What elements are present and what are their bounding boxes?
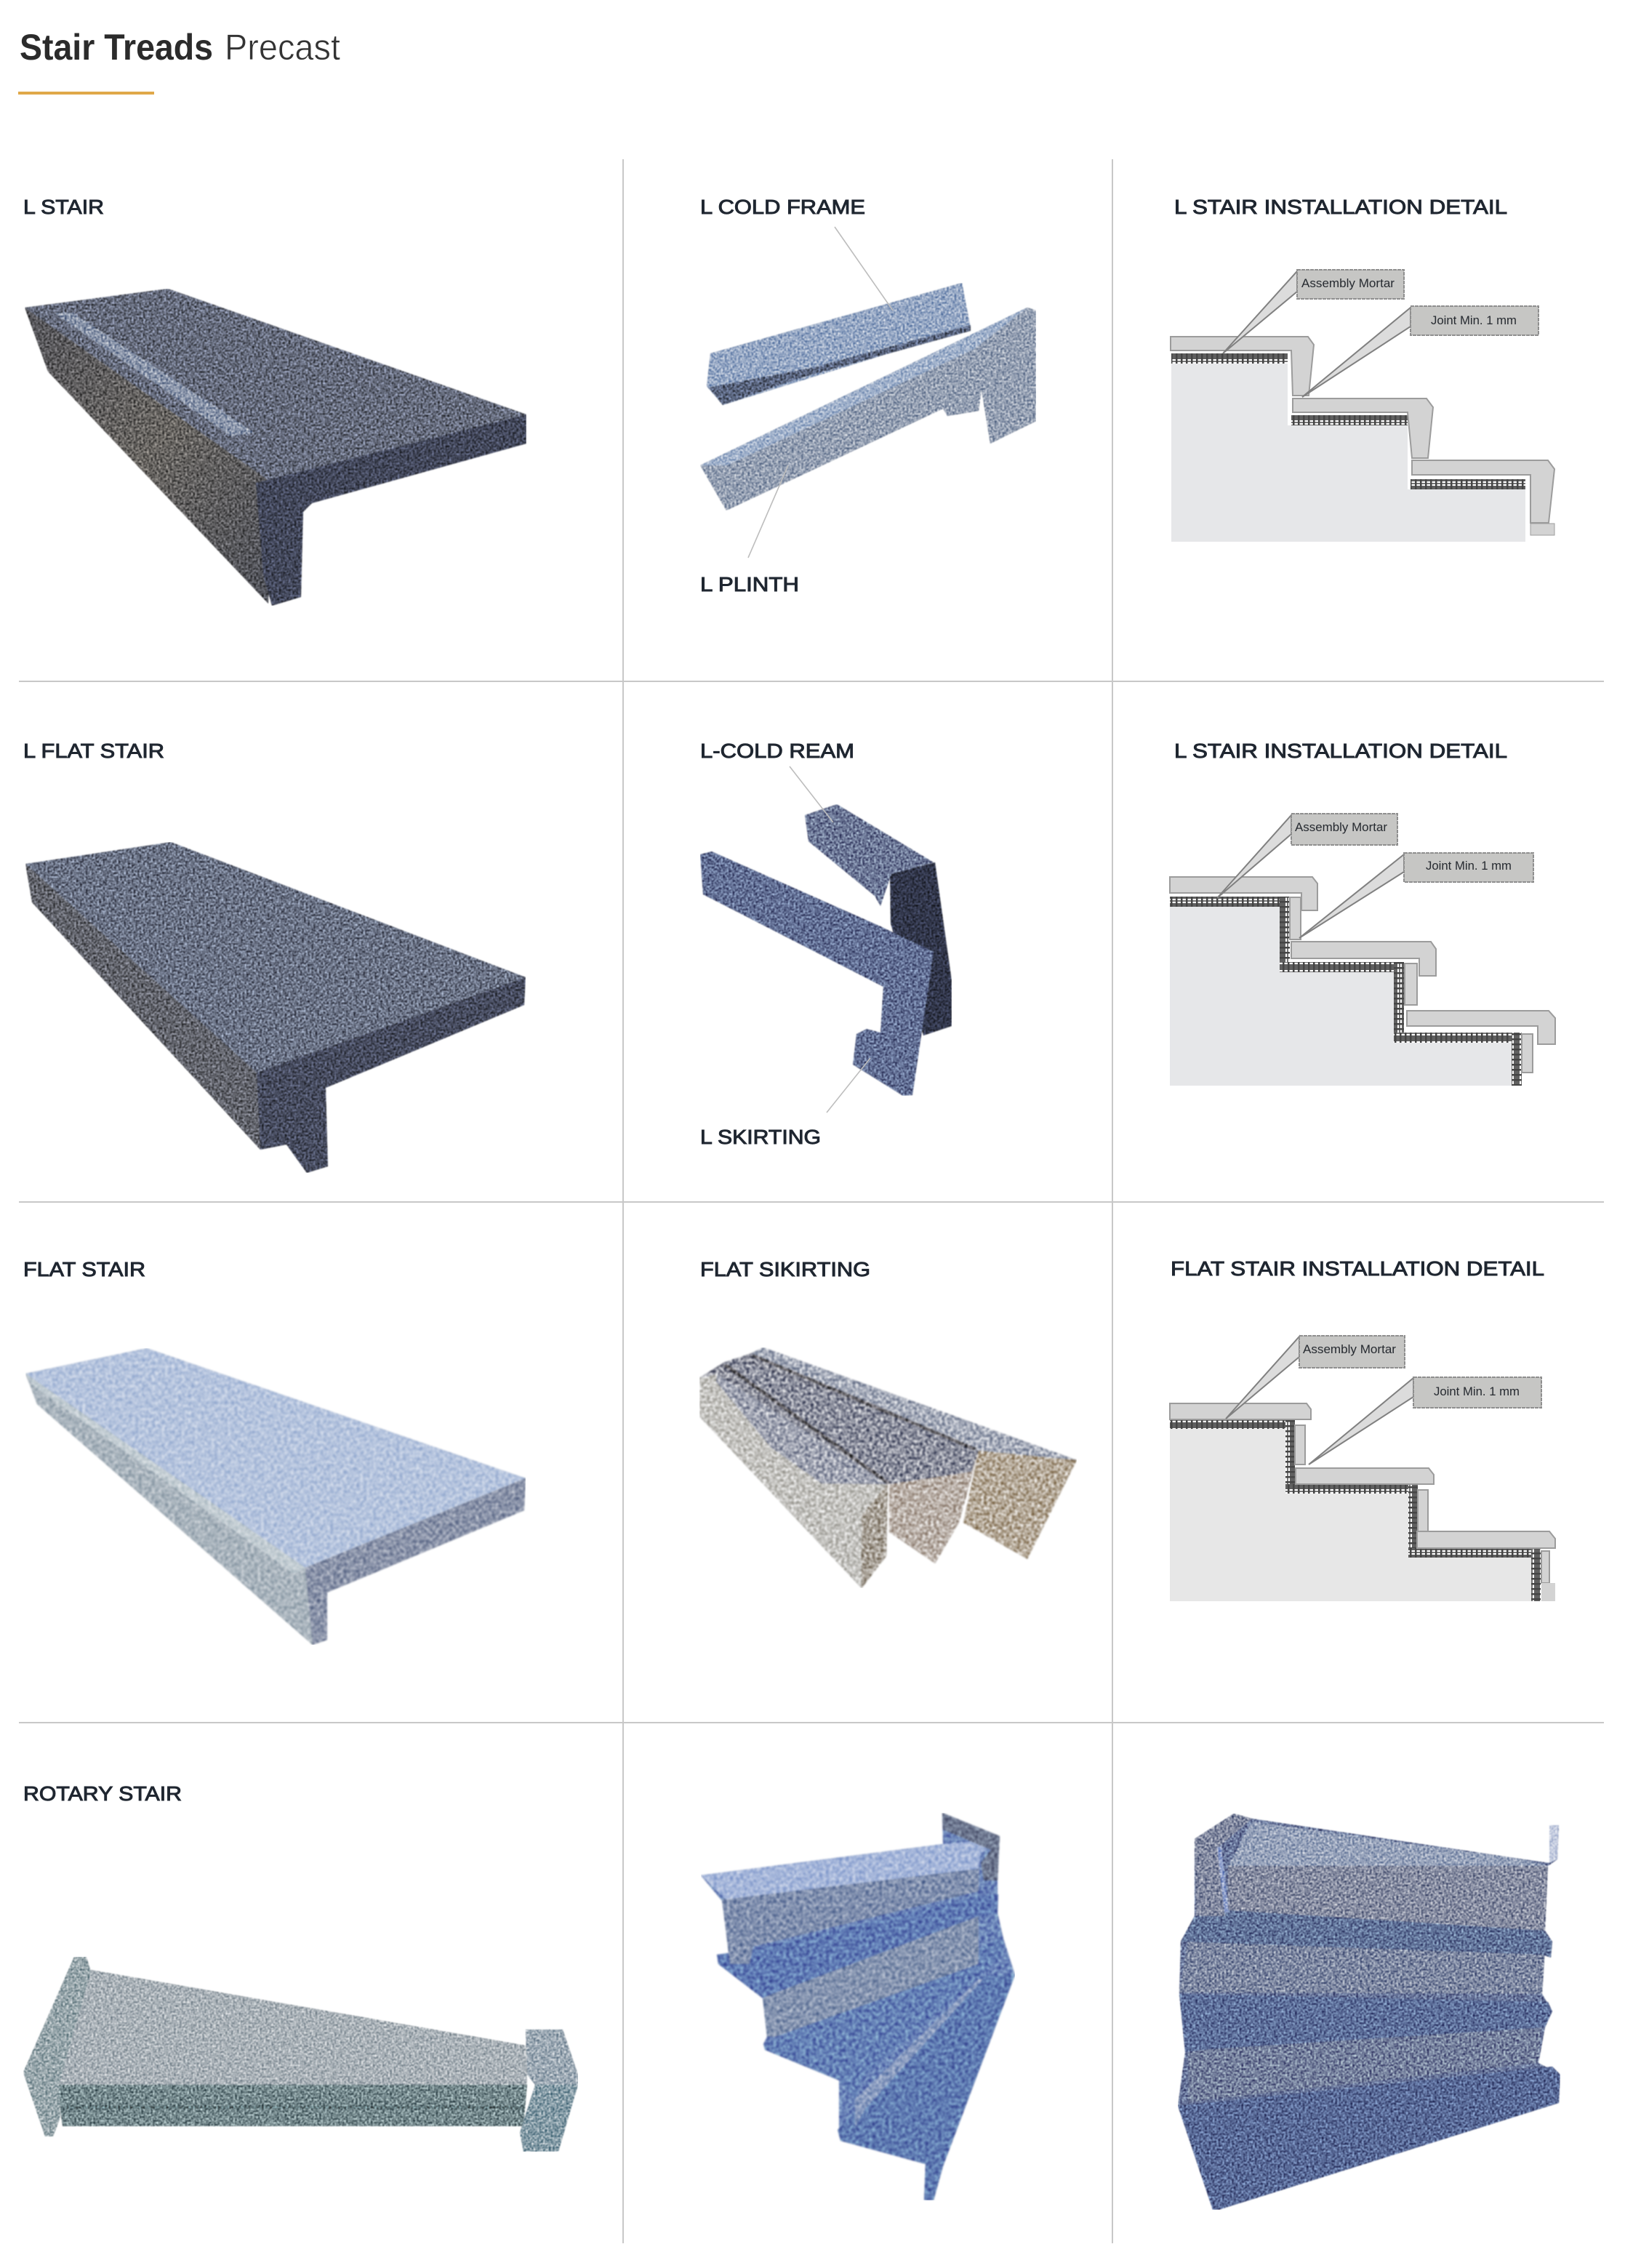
callout: joint min 1 mm: Joint Min. 1 mm	[1431, 313, 1517, 327]
diagram: L stair section 2	[1170, 815, 1555, 1086]
leader line: L cold frame	[835, 227, 893, 310]
label: flat stair: FLAT STAIR	[23, 1258, 145, 1281]
panel: flat skirting	[699, 1258, 1077, 1588]
callout: assembly mortar 3: Assembly Mortar	[1303, 1342, 1396, 1356]
leader line: L cold ream	[790, 766, 833, 822]
callout: joint min 1 mm	[1411, 306, 1538, 335]
image: L stair tread	[25, 289, 526, 606]
leader line: L plinth	[748, 465, 788, 558]
panel: flat stair	[23, 1258, 526, 1645]
panel: L cold frame and L plinth	[700, 196, 1036, 596]
panel: rotary stair	[23, 1782, 578, 2152]
panel: rotary stair assembled view	[701, 1813, 1015, 2200]
image: flat stair tread	[25, 1348, 526, 1645]
label: L flat stair: L FLAT STAIR	[23, 740, 164, 762]
title	[20, 27, 340, 68]
panel: rotary stair front view	[1178, 1814, 1560, 2210]
label: flat stair installation detail: FLAT STAIR INSTALLATION DETAIL	[1171, 1257, 1544, 1280]
image: L cold frame and plinth pieces	[700, 283, 1036, 510]
label: L stair: L STAIR	[23, 196, 104, 218]
callout: joint min 1 mm 3	[1413, 1377, 1541, 1408]
title: Precast	[225, 27, 340, 68]
title underline	[18, 92, 154, 95]
callout: joint min 1 mm 2	[1404, 853, 1533, 882]
label: rotary stair: ROTARY STAIR	[23, 1782, 182, 1805]
leader line: L skirting	[827, 1058, 870, 1113]
image: flat skirting pieces	[699, 1347, 1077, 1588]
panel: L stair installation detail 2	[1170, 740, 1555, 1086]
label: L stair installation detail: L STAIR INSTALLATION DETAIL	[1174, 196, 1507, 218]
diagram: flat stair section	[1170, 1337, 1555, 1601]
image: L cold ream and skirting pieces	[700, 804, 952, 1096]
label: L plinth: L PLINTH	[700, 573, 799, 596]
label: L cold frame: L COLD FRAME	[700, 196, 865, 218]
callout: assembly mortar 2: Assembly Mortar	[1295, 820, 1387, 834]
diagram: L stair section	[1171, 271, 1554, 542]
panel: L stair installation detail	[1171, 196, 1554, 542]
image: winding stair front view	[1178, 1814, 1560, 2210]
image: rotary stair tread	[23, 1957, 578, 2152]
callout: joint min 1 mm 3: Joint Min. 1 mm	[1434, 1385, 1520, 1398]
panel: L cold ream and L skirting	[700, 740, 952, 1148]
image: L flat stair tread	[25, 842, 526, 1173]
label: flat skirting: FLAT SIKIRTING	[700, 1258, 870, 1281]
label: L cold ream: L-COLD REAM	[700, 740, 854, 762]
label: L skirting: L SKIRTING	[700, 1126, 821, 1148]
label: L stair installation detail 2: L STAIR INSTALLATION DETAIL	[1174, 740, 1507, 762]
panel: L stair	[23, 196, 526, 606]
title: Stair Treads	[20, 27, 213, 68]
callout: assembly mortar	[1297, 270, 1404, 299]
callout: assembly mortar: Assembly Mortar	[1301, 276, 1395, 290]
image: winding stair side view	[701, 1813, 1015, 2200]
callout: joint min 1 mm 2: Joint Min. 1 mm	[1426, 859, 1512, 873]
panel: L flat stair	[23, 740, 526, 1173]
panel: flat stair installation detail	[1170, 1257, 1555, 1601]
callout: assembly mortar 3	[1299, 1336, 1405, 1368]
callout: assembly mortar 2	[1291, 814, 1397, 845]
